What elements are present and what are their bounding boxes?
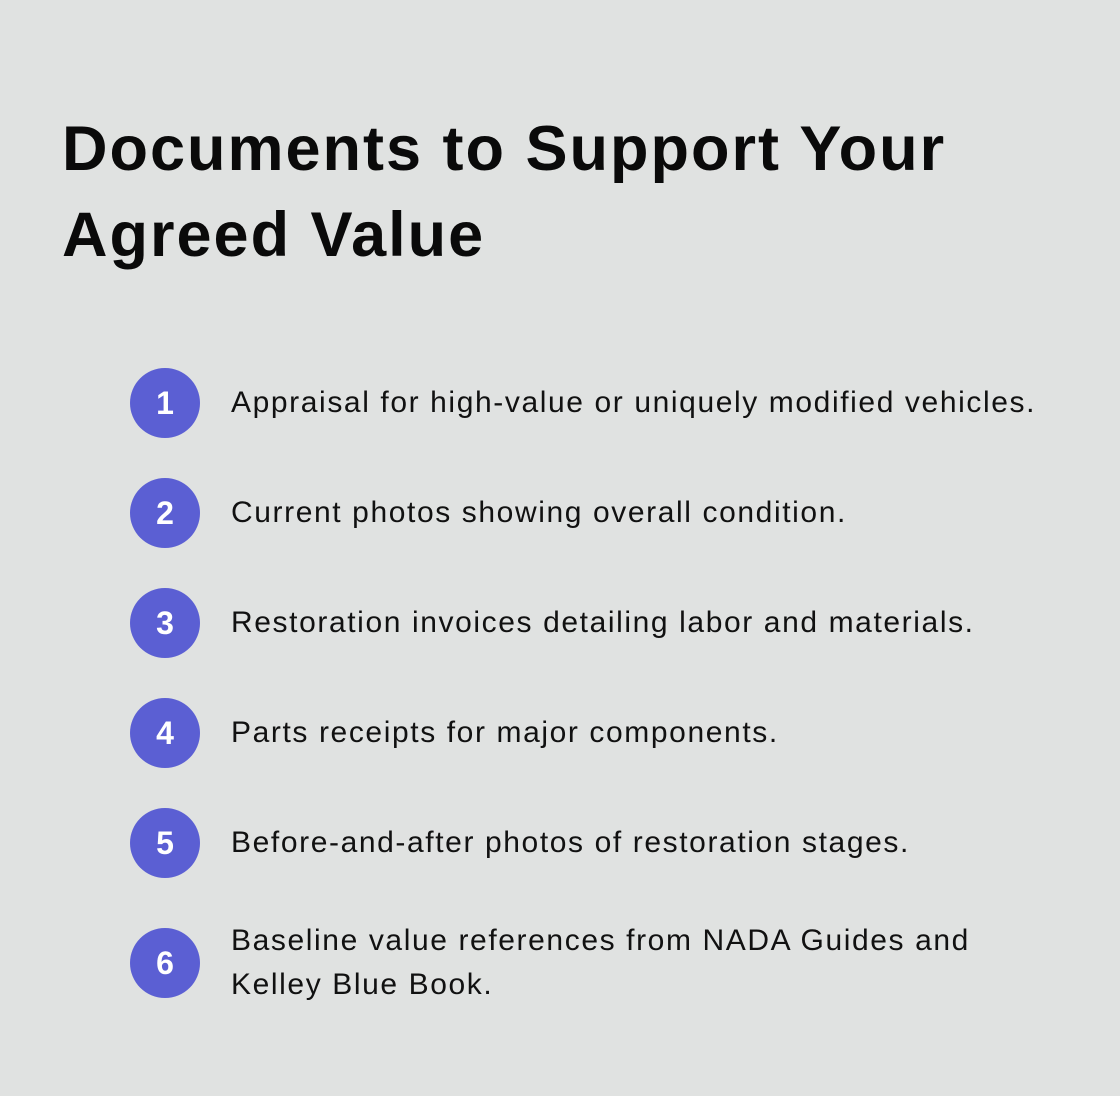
- text 5: Before-and-after photos of restoration stages.: [231, 826, 910, 859]
- number 2: [130, 478, 200, 548]
- number 4: [130, 698, 200, 768]
- title: [62, 114, 946, 270]
- number 5: [130, 808, 200, 878]
- text 6: Baseline value references from NADA Guides and: [231, 924, 970, 957]
- number 6: 6: [156, 945, 174, 981]
- text 3: Restoration invoices detailing labor and materials.: [231, 606, 975, 639]
- number 5: 5: [156, 825, 174, 861]
- number 1: 1: [156, 385, 174, 421]
- item 5: [130, 808, 910, 878]
- item 3: [130, 588, 975, 658]
- item 4: [130, 698, 779, 768]
- number 2: 2: [156, 495, 174, 531]
- item 6: [130, 924, 970, 1001]
- number 3: [130, 588, 200, 658]
- item 1: [130, 368, 1036, 438]
- text 6: [231, 924, 970, 1001]
- number 6: [130, 928, 200, 998]
- number 4: 4: [156, 715, 174, 751]
- text 6: Kelley Blue Book.: [231, 968, 493, 1001]
- title: Documents to Support Your: [62, 114, 946, 184]
- text 4: Parts receipts for major components.: [231, 716, 779, 749]
- number 1: [130, 368, 200, 438]
- item 2: [130, 478, 847, 548]
- number 3: 3: [156, 605, 174, 641]
- title: Agreed Value: [62, 200, 485, 270]
- text 2: Current photos showing overall condition.: [231, 496, 847, 529]
- text 1: Appraisal for high-value or uniquely modified vehicles.: [231, 386, 1036, 419]
